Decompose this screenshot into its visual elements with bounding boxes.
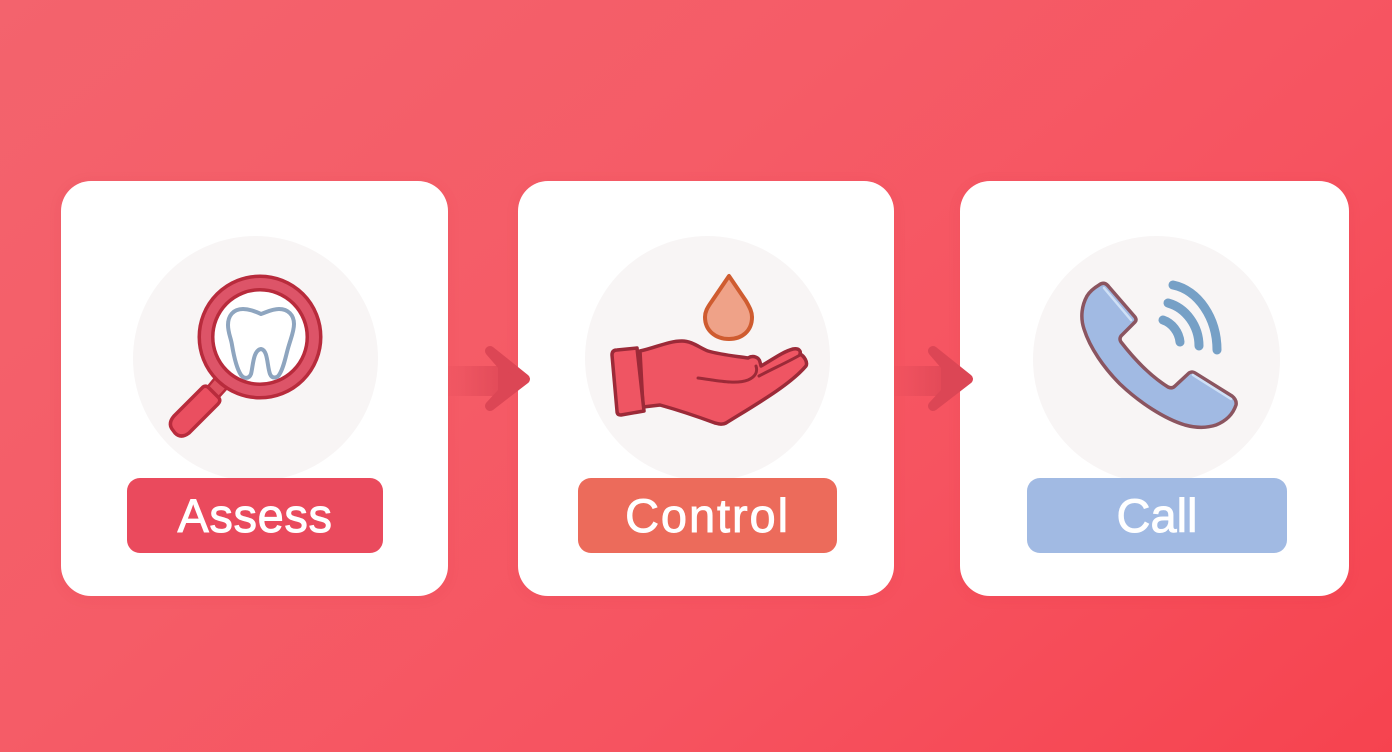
icon backdrop: assess [133,236,378,481]
label: Call: Call [1117,489,1197,542]
label: Call [1027,478,1287,553]
magnifier ring [206,283,314,391]
lens [213,290,307,384]
label: Control [578,478,837,553]
panel: assess [61,181,448,596]
icon: phone with signal [1082,283,1236,427]
arrow: assess to control [448,351,525,406]
magnifier handle [170,386,220,436]
sleeve cuff [612,348,644,415]
magnifier neck [206,378,227,399]
icon: magnifier with tooth [170,283,314,436]
icon: blood drop [705,276,752,339]
label: Assess [127,478,383,553]
arrow: control to call [894,351,968,406]
tooth [228,309,294,378]
hand palm and fingers [640,341,807,424]
phone handset [1082,283,1236,427]
label: Assess: Assess [177,489,333,542]
label: Control: Control [625,489,790,542]
icon: hand [612,341,807,424]
panel: call [960,181,1349,596]
signal waves [1163,285,1217,350]
finger lines [698,355,800,382]
icon backdrop: control [585,236,830,481]
handset highlights [1104,288,1231,399]
panel: control [518,181,894,596]
icon backdrop: call [1033,236,1280,483]
